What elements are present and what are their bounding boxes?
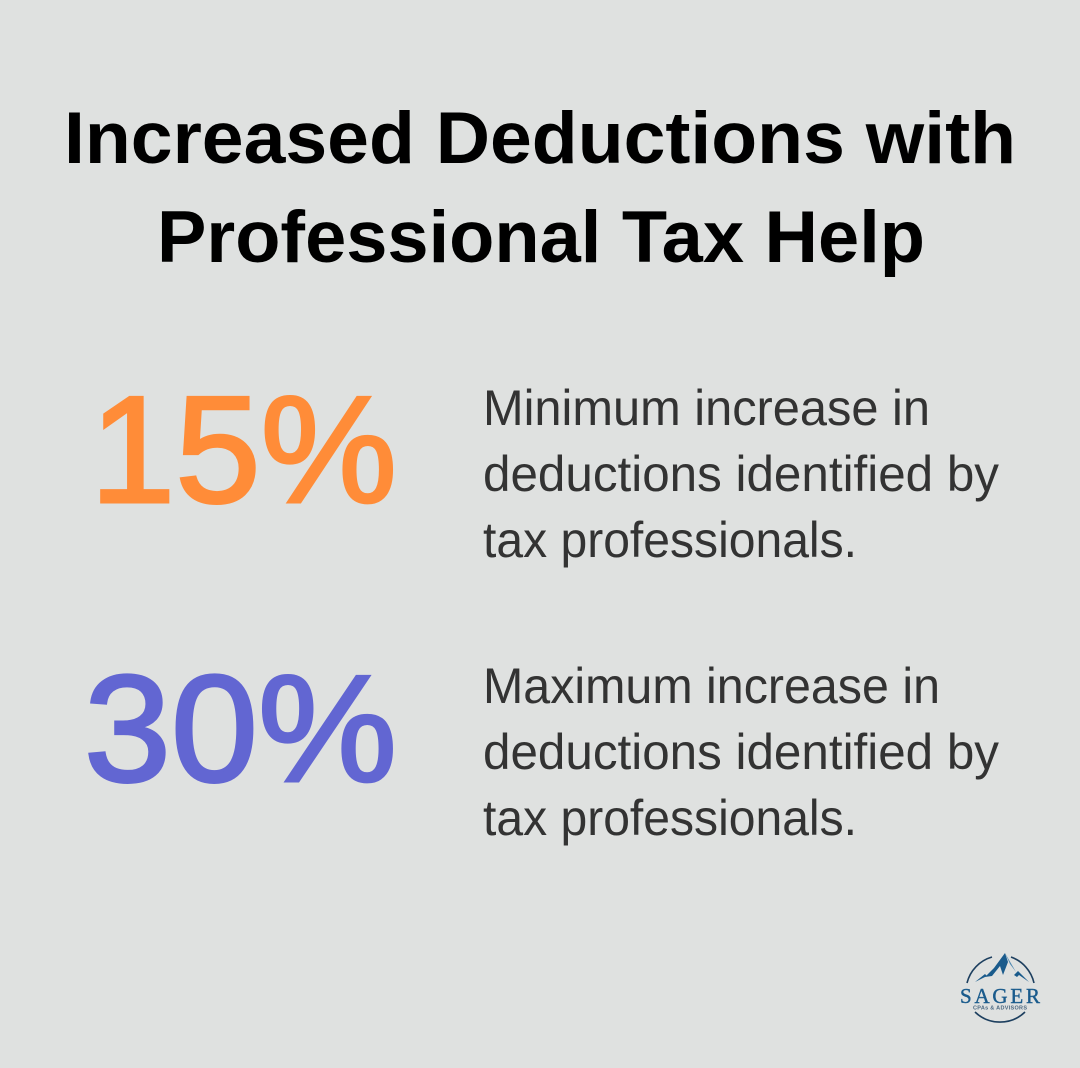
stat: 15%: 15% — [90, 365, 397, 535]
text: maximum increase description: Maximum increase in — [483, 658, 940, 714]
text: maximum increase description — [483, 658, 999, 846]
title — [64, 98, 1016, 278]
logo wordmark: SAGER — [960, 984, 1040, 1008]
text: maximum increase description: deductions identified by — [483, 724, 999, 780]
icon: mountains — [975, 953, 1029, 982]
text: minimum increase description: deductions identified by — [483, 446, 999, 502]
text: minimum increase description: tax professionals. — [483, 512, 857, 568]
title: Increased Deductions with — [64, 98, 1016, 179]
title: Professional Tax Help — [157, 197, 925, 278]
text: minimum increase description — [483, 380, 999, 568]
stat: 30%: 30% — [84, 644, 397, 814]
text: minimum increase description: Minimum increase in — [483, 380, 930, 436]
text: maximum increase description: tax professionals. — [483, 790, 857, 846]
logo: Sager CPAs & Advisors — [960, 953, 1040, 1022]
icon: circle arcs — [967, 957, 1034, 1022]
logo tagline: CPAs & ADVISORS — [973, 1006, 1027, 1012]
